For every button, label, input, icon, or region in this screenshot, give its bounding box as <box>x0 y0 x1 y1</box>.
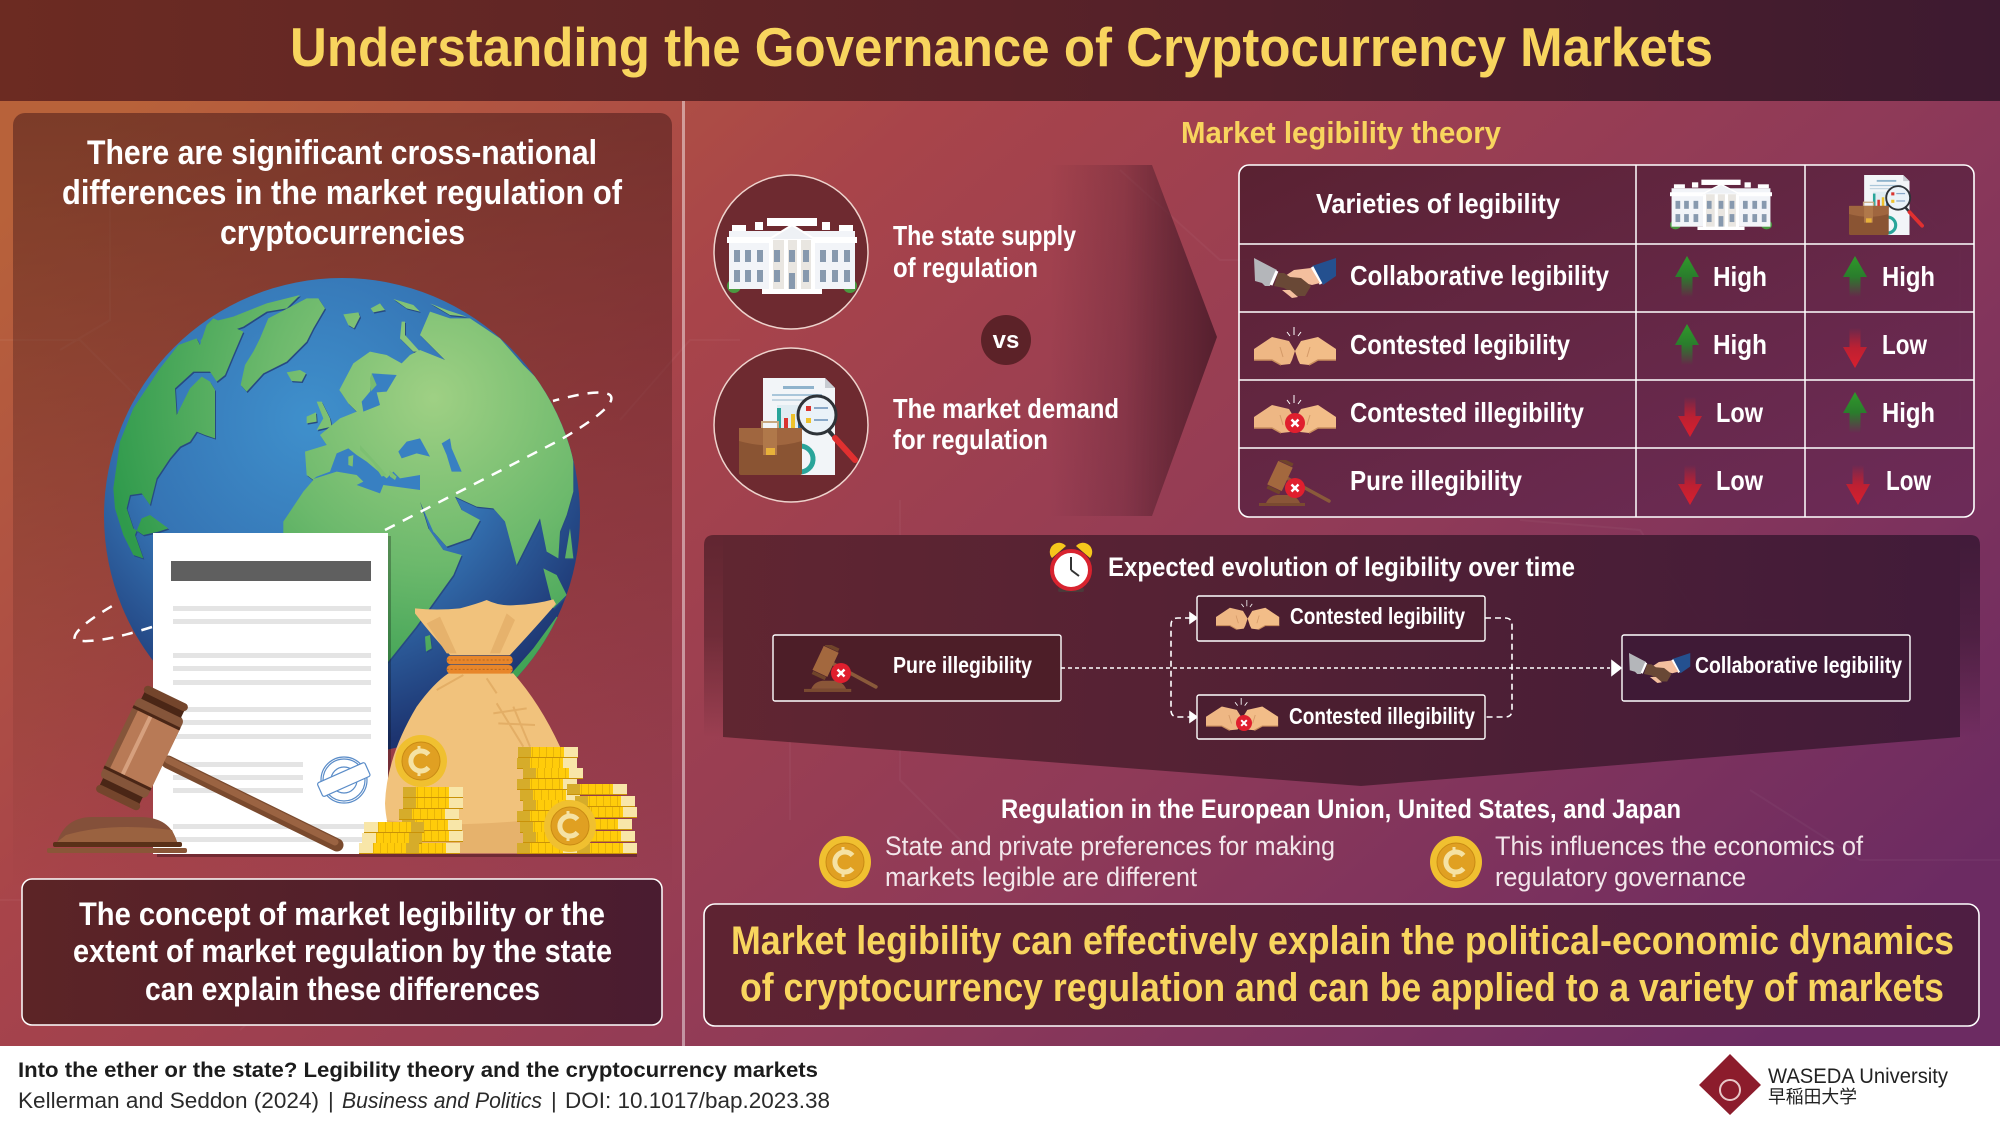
citation details: DOI: 10.1017/bap.2023.38 <box>565 1088 830 1113</box>
title: Understanding the Governance of Cryptocurrency Markets <box>290 16 1713 78</box>
row: contested legibility: High <box>1713 329 1767 360</box>
heading: market legibility theory: Market legibility theory <box>1181 115 1502 150</box>
illustration: document <box>153 533 391 854</box>
text: economics <box>1495 831 1863 892</box>
callout: conclusion <box>704 904 1979 1026</box>
row: pure illegibility <box>1259 457 1931 506</box>
panel heading: There are significant cross-national <box>87 134 597 172</box>
node: contested illegibility: Contested illegibility <box>1289 703 1475 729</box>
node: collaborative legibility <box>1622 635 1910 701</box>
text: market demand: The market demand <box>893 393 1119 424</box>
row: pure illegibility: Low <box>1716 465 1763 496</box>
vs badge: vs <box>993 327 1019 354</box>
arrow: chevron to table <box>1050 165 1217 516</box>
section: regulation in EU, US, Japan <box>819 794 1863 892</box>
text: market demand <box>893 393 1119 455</box>
node: contested illegibility <box>1197 695 1485 739</box>
citation details: | <box>328 1088 334 1113</box>
row: contested illegibility: Low <box>1716 397 1763 428</box>
illustration: coins <box>359 735 637 854</box>
icon: alarm clock <box>1050 543 1092 592</box>
text: preferences: State and private preferences for making <box>885 831 1335 861</box>
callout: market legibility concept: can explain these differences <box>145 971 540 1007</box>
heading: evolution: Expected evolution of legibility over time <box>1108 552 1575 582</box>
node: contested legibility <box>1197 596 1485 641</box>
text: state supply: The state supply <box>893 220 1076 251</box>
flow connectors <box>1061 613 1621 722</box>
table header <box>1316 175 1922 235</box>
text: preferences: markets legible are different <box>885 862 1197 892</box>
vs badge <box>981 315 1031 365</box>
illustration: money bag <box>385 599 567 853</box>
footer <box>0 1046 2000 1125</box>
node: pure illegibility: Pure illegibility <box>893 652 1032 678</box>
text: economics: regulatory governance <box>1495 862 1746 892</box>
citation details: Business and Politics <box>342 1088 542 1113</box>
citation details: Kellerman and Seddon (2024) <box>18 1088 319 1113</box>
table header: Varieties of legibility <box>1316 188 1560 219</box>
title banner <box>0 0 2000 101</box>
icon: state building <box>714 175 868 329</box>
row: contested illegibility: High <box>1882 397 1935 428</box>
table: varieties of legibility <box>1239 165 1974 517</box>
citation title: Into the ether or the state? Legibility theory and the cryptocurrency markets <box>18 1058 818 1082</box>
illustration: gavel <box>47 684 637 857</box>
row: contested legibility: Low <box>1882 329 1927 360</box>
divider <box>682 101 685 1046</box>
callout: market legibility concept <box>22 879 662 1025</box>
panel heading: differences in the market regulation of <box>62 174 623 212</box>
panel: expected evolution <box>704 535 1980 786</box>
logo: Waseda University: WASEDA University <box>1768 1065 1948 1088</box>
node: collaborative legibility: Collaborative legibility <box>1695 652 1902 678</box>
node: pure illegibility <box>773 635 1061 701</box>
icon: market report <box>714 348 868 502</box>
orbit <box>75 393 611 641</box>
subheading: Regulation in the European Union, United States, and Japan <box>1001 794 1681 824</box>
row: collaborative legibility: Collaborative legibility <box>1350 260 1609 291</box>
panel heading <box>62 134 623 252</box>
text: state supply <box>893 220 1076 283</box>
row: collaborative legibility: High <box>1713 261 1767 292</box>
row: contested illegibility <box>1254 392 1935 437</box>
stamp <box>317 757 371 803</box>
logo: Waseda University: 早稲田大学 <box>1768 1087 1857 1107</box>
text: market demand: for regulation <box>893 424 1048 455</box>
row: pure illegibility: Low <box>1886 465 1931 496</box>
panel: cross-national differences <box>13 113 672 1033</box>
panel: state supply vs market demand <box>714 175 1119 502</box>
row: collaborative legibility <box>1254 256 1935 298</box>
icon: coin <box>1430 836 1482 888</box>
illustration: globe <box>75 278 611 754</box>
citation details: | <box>551 1088 557 1113</box>
callout: market legibility concept: The concept of market legibility or the <box>79 896 605 932</box>
callout: market legibility concept: extent of market regulation by the state <box>73 933 612 969</box>
row: contested legibility: Contested legibility <box>1350 329 1570 360</box>
text: economics: This influences the economics of <box>1495 831 1863 861</box>
row: pure illegibility: Pure illegibility <box>1350 465 1522 496</box>
node: contested legibility: Contested legibility <box>1290 603 1465 629</box>
icon: coin <box>819 836 871 888</box>
logo: Waseda University <box>1699 1054 1948 1115</box>
row: contested illegibility: Contested illegibility <box>1350 397 1584 428</box>
text: preferences <box>885 831 1335 892</box>
row: collaborative legibility: High <box>1882 261 1935 292</box>
text: state supply: of regulation <box>893 252 1038 283</box>
panel heading: cryptocurrencies <box>220 214 465 252</box>
citation details <box>18 1088 830 1113</box>
row: contested legibility <box>1254 324 1927 368</box>
